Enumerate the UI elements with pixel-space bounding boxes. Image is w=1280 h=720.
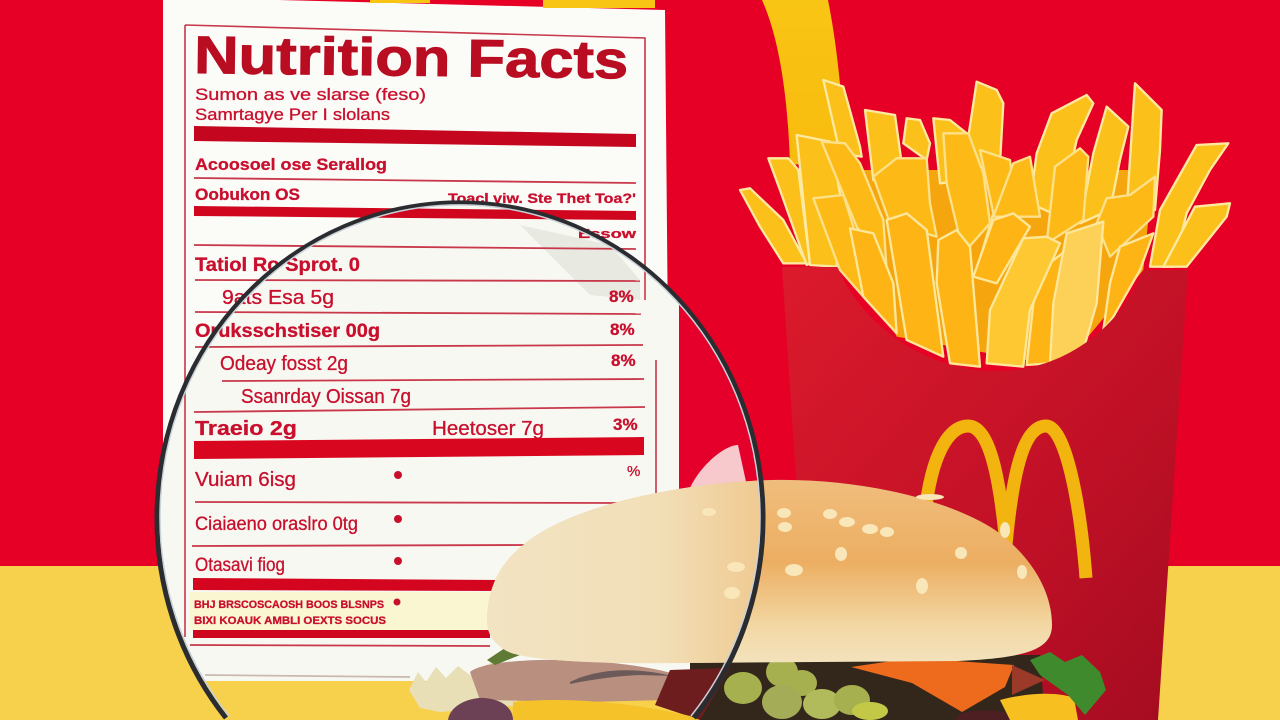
row: dietary fiber (220, 351, 636, 375)
row: dietary fiber: 8% (611, 351, 636, 370)
left lettuce leaf (487, 648, 520, 665)
row: cholesterol: Oruksschstiser 00g (195, 321, 380, 342)
meat slice (470, 660, 685, 702)
lower patty piece (655, 668, 730, 720)
row: protein: Traeio 2g (195, 418, 297, 440)
footnote text: BIXI KOAUK AMBLI OEXTS SOCUS (194, 615, 386, 627)
row: vitamin: % (627, 463, 640, 480)
row: vitamin (195, 463, 640, 491)
row: sugars: Ssanrday Oissan 7g (241, 386, 411, 408)
row rules (190, 178, 645, 677)
inner filling shadow (690, 655, 1045, 720)
row: cholesterol: 8% (610, 320, 635, 339)
yellow strips behind paper (370, 0, 655, 8)
patty right (955, 710, 1030, 720)
amount per serving: Acoosoel ose Serallog (195, 155, 387, 174)
burger (409, 480, 1106, 720)
lettuce right (1030, 652, 1106, 715)
row: saturated fat (222, 287, 634, 309)
magnifying lens interior (150, 200, 770, 720)
footnote text (194, 598, 400, 627)
serving text: Samrtagye Per I slolans (195, 105, 390, 124)
row: protein: Heetoser 7g (432, 418, 544, 440)
row: vitamin: Vuiam 6isg (195, 469, 296, 491)
nutrition label paper (163, 0, 668, 460)
red meat right (1012, 665, 1045, 695)
lettuce ruffle (409, 660, 520, 712)
row: saturated fat: 9ats Esa 5g (222, 287, 334, 309)
magnifying glass rim (157, 203, 763, 718)
bar (193, 578, 500, 591)
lens bun tint (487, 480, 760, 664)
row: calcium: Ciaiaeno oraslro 0tg (195, 514, 358, 535)
row: dietary fiber: Odeay fosst 2g (220, 353, 348, 375)
row: sodium (195, 185, 636, 206)
pickles (724, 657, 888, 720)
sesame seeds (702, 494, 1027, 599)
row: protein: 3% (613, 415, 638, 434)
label frame (185, 25, 656, 637)
serving text: Sumon as ve slarse (feso) (195, 85, 426, 104)
row: protein (195, 415, 638, 440)
footnote text: BHJ BRSCOSCAOSH BOOS BLSNPS (194, 599, 384, 611)
nutrition facts label (185, 25, 656, 677)
yellow arch behind fries (762, 0, 846, 165)
row: sodium: Oobukon OS (195, 185, 300, 204)
thin bar (194, 206, 636, 220)
bottom bar (193, 630, 490, 638)
small right note: Essow (578, 226, 637, 241)
row: cholesterol (195, 320, 635, 342)
row: saturated fat: 8% (609, 287, 634, 306)
yellow table (0, 566, 1280, 720)
thick bar (194, 126, 636, 147)
bun (487, 480, 1052, 663)
row: other (195, 555, 402, 576)
row: total fat: Tatiol Ro Sprot. 0 (195, 255, 360, 276)
red background (0, 0, 1280, 566)
cheese right (1000, 694, 1078, 720)
golden arches logo (926, 426, 1086, 578)
serving text (195, 85, 426, 124)
title: Nutrition Facts (194, 26, 629, 90)
tomato (851, 658, 1014, 712)
purple onion (448, 698, 513, 720)
row: sodium: Toacl viw. Ste Thet Toa?' (448, 190, 636, 206)
row: other: Otasavi fiog (195, 555, 285, 576)
cheese left (513, 700, 700, 720)
fries (740, 80, 1230, 367)
fries box (782, 267, 1188, 720)
meat shadow (570, 670, 672, 684)
thick bar (194, 437, 644, 459)
